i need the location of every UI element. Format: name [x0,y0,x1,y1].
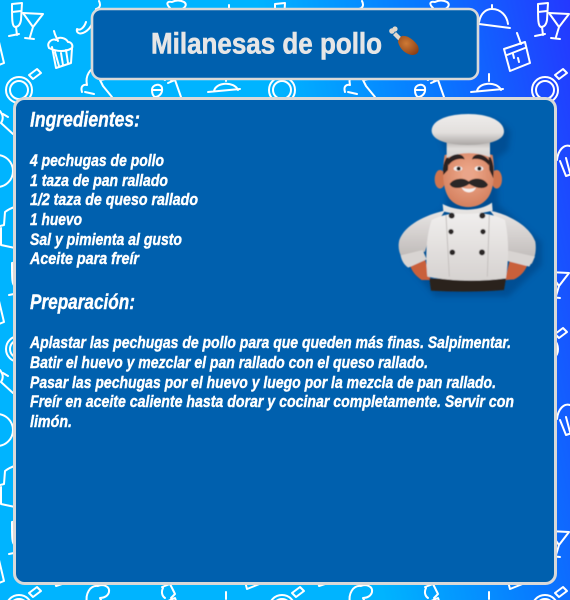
face [443,152,494,207]
ingredients list: 4 pechugas de pollo [29,152,164,170]
sleeves [399,211,445,259]
icon: chef illustration [399,114,542,297]
heading: ingredients: Ingredientes: [30,108,140,132]
main recipe panel [14,98,556,584]
coat [426,212,508,281]
ingredients list [29,152,198,268]
smile [462,187,476,192]
heading: preparation: Preparación: [30,291,135,314]
preparation text: Pasar las pechugas por el huevo y luego por la mezcla de pan rallado. [30,374,496,392]
ears [435,170,445,189]
preparation text: limón. [30,413,72,431]
ingredients list: 1 huevo [30,211,82,229]
icon: chicken leg [389,26,419,55]
eyebrows [447,154,465,165]
ingredients list: 1/2 taza de queso rallado [30,191,198,209]
moustache [450,179,488,188]
eyes [454,166,462,171]
ingredients list: 1 taza de pan rallado [30,172,168,190]
nose [462,169,474,181]
preparation text: Batir el huevo y mezclar el pan rallado con el queso rallado. [30,354,428,372]
hat [447,139,490,158]
ingredients list: Sal y pimienta al gusto [30,231,182,249]
title panel [92,9,478,79]
trousers [429,279,506,292]
ingredients list: Aceite para freír [29,250,140,268]
preparation text [29,334,514,431]
title: Milanesas de pollo [151,28,382,60]
hands [410,259,431,280]
